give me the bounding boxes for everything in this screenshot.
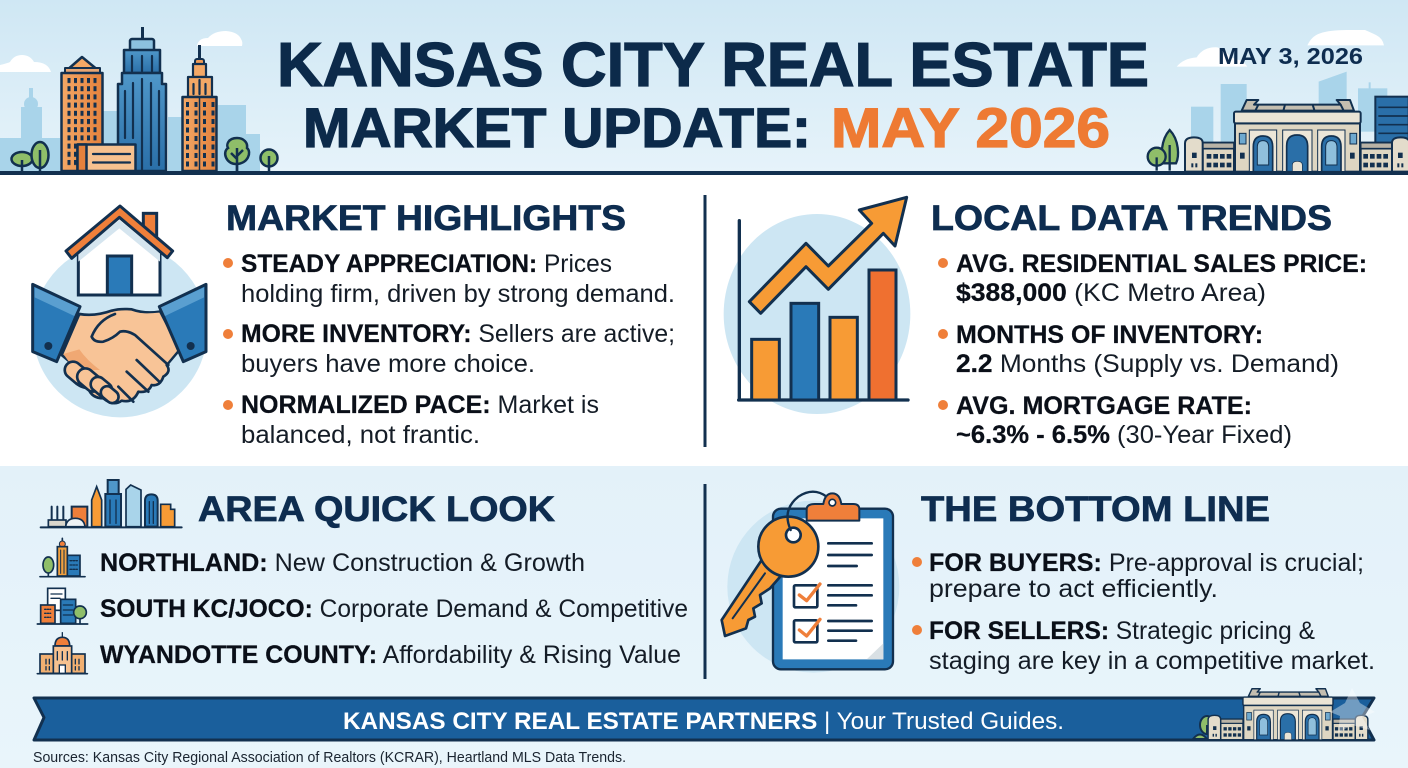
trees (12, 138, 278, 172)
header ground line (0, 171, 1408, 175)
title highlight: MAY 2026 (831, 96, 1110, 159)
row: Northland (40, 538, 585, 577)
bullet: for sellers (912, 617, 1375, 675)
trees (1148, 130, 1178, 171)
icon: house and handshake (33, 206, 207, 417)
panel: area quick look (37, 480, 688, 674)
background buildings (0, 88, 260, 172)
header left skyline illustration (0, 27, 278, 172)
row: Northland: NORTHLAND: New Construction & Growth (100, 549, 585, 577)
banner station (1208, 689, 1368, 740)
data: months of inventory: 2.2 Months (Supply vs. Demand) (956, 350, 1339, 378)
icon: key and clipboard (722, 492, 899, 673)
title line 1: KANSAS CITY REAL ESTATE (277, 31, 1149, 100)
bullet: steady appreciation: STEADY APPRECIATION: Prices (241, 250, 612, 278)
bullet: steady appreciation: holding firm, driven by strong demand. (241, 280, 675, 308)
icon: bar chart with rising arrow (724, 197, 910, 414)
heading: MARKET HIGHLIGHTS (226, 199, 626, 238)
orange art-deco tower (182, 45, 216, 171)
row: South KC/JoCo: SOUTH KC/JOCO: Corporate Demand & Competitive (100, 595, 688, 623)
sources: Sources: Kansas City Regional Association of Realtors (KCRAR), Heartland MLS Data Trends. (33, 750, 626, 766)
blue office building (1375, 97, 1408, 143)
header right Union Station illustration (1148, 30, 1408, 172)
bullet: for buyers: prepare to act efficiently. (929, 575, 1218, 603)
bullet: for sellers: staging are key in a competitive market. (929, 647, 1375, 675)
data: months of inventory (938, 321, 1339, 378)
row: Wyandotte County (37, 633, 681, 674)
bullet: normalized pace: balanced, not frantic. (241, 421, 480, 449)
orange office tower (62, 57, 102, 171)
background buildings (1191, 72, 1387, 172)
heading: THE BOTTOM LINE (921, 490, 1270, 529)
data: mortgage rate: AVG. MORTGAGE RATE: (956, 392, 1252, 420)
ribbon (34, 698, 1374, 740)
icon: mini skyline (41, 480, 182, 527)
lower panel background (0, 466, 1408, 768)
panel: the bottom line (722, 490, 1375, 675)
data: months of inventory: MONTHS OF INVENTORY: (956, 321, 1263, 349)
station building (1185, 100, 1408, 172)
bullet: normalized pace: NORMALIZED PACE: Market is (241, 391, 599, 419)
blue skyscraper (118, 27, 166, 171)
date: MAY 3, 2026 (1218, 43, 1363, 69)
title line 2: MARKET UPDATE: (303, 96, 811, 159)
bullet: steady appreciation (223, 250, 675, 308)
banner star (1330, 688, 1375, 733)
panel: market highlights (33, 199, 675, 449)
bullet: more inventory: buyers have more choice. (241, 350, 535, 378)
data: average price (938, 250, 1367, 307)
bullet: for buyers: FOR BUYERS: Pre-approval is crucial; (929, 549, 1364, 577)
data: mortgage rate (938, 392, 1292, 449)
bullet: more inventory (223, 320, 675, 378)
heading: AREA QUICK LOOK (198, 490, 555, 529)
footer banner (34, 688, 1375, 740)
banner text: KANSAS CITY REAL ESTATE PARTNERS | Your Trusted Guides. (343, 708, 1064, 735)
bullet: more inventory: MORE INVENTORY: Sellers are active; (241, 320, 675, 348)
data: mortgage rate: ~6.3% - 6.5% (30-Year Fixed) (956, 421, 1292, 449)
clouds (0, 31, 242, 72)
panel: local data trends (724, 197, 1367, 449)
heading: LOCAL DATA TRENDS (931, 199, 1332, 238)
bullet: for buyers (912, 549, 1364, 603)
main white panel background (0, 175, 1408, 466)
bullet: normalized pace (223, 391, 599, 449)
title (277, 31, 1149, 159)
header background (0, 0, 1408, 173)
banner tree (1193, 716, 1214, 739)
data: average price: $388,000 (KC Metro Area) (956, 279, 1266, 307)
row: Wyandotte County: WYANDOTTE COUNTY: Affordability & Rising Value (100, 641, 681, 669)
bullet: for sellers: FOR SELLERS: Strategic pricing & (929, 617, 1315, 645)
low orange block (78, 144, 136, 171)
data: average price: AVG. RESIDENTIAL SALES PRICE: (956, 250, 1367, 278)
clouds (1177, 30, 1384, 67)
